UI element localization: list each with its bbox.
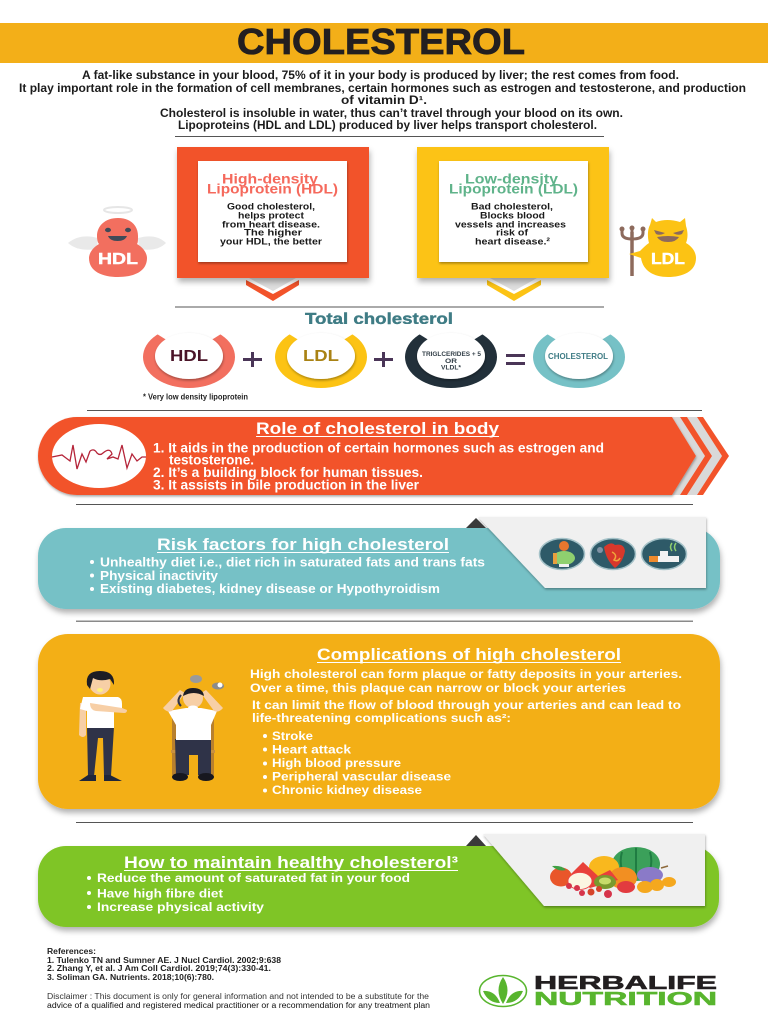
- panel: LDL card: heart disease.²: [475, 236, 550, 248]
- intro text: Lipoproteins (HDL and LDL) produced by liver helps transport cholesterol.: [178, 120, 597, 132]
- panel: complications: Heart attack: [272, 744, 352, 756]
- equation: total cholesterol: [141, 324, 627, 388]
- panel: complications: [38, 634, 720, 809]
- panel: LDL card: vessels and increases: [455, 220, 566, 230]
- panel: HDL card: The higher: [244, 228, 302, 238]
- title banner: CHOLESTEROL: [237, 21, 525, 62]
- intro text: of vitamin D¹.: [341, 95, 427, 107]
- panel: maintain healthy cholesterol: [38, 834, 719, 927]
- panel: maintain healthy cholesterol: Increase physical activity: [97, 900, 264, 914]
- operator: plus: [374, 352, 393, 367]
- disclaimer: [47, 992, 430, 1010]
- icon: heartbeat: [52, 424, 146, 488]
- panel: complications: Peripheral vascular disease: [272, 772, 451, 784]
- panel: risk factors: Risk factors for high cholesterol: [157, 535, 449, 554]
- panel: HDL card: Good cholesterol,: [227, 202, 315, 212]
- ring: triglycerides: [403, 324, 499, 388]
- ring: HDL: [141, 324, 237, 388]
- logo: Herbalife Nutrition: HERBALIFE: [534, 972, 717, 993]
- intro text: It play important role in the formation of cell membranes, certain hormones such as estrogen and testosterone, and production: [19, 83, 746, 95]
- panel: complications: High blood pressure: [272, 758, 401, 770]
- references: 2. Zhang Y, et al. J Am Coll Cardiol. 2019;74(3):330-41.: [47, 964, 271, 973]
- panel: role of cholesterol: [38, 417, 729, 495]
- icon: cigarette: [642, 538, 686, 570]
- panel: role of cholesterol: 3. It assists in bile production in the liver: [153, 478, 420, 492]
- operator: plus: [243, 352, 262, 367]
- ring: cholesterol: CHOLESTEROL: [548, 352, 608, 361]
- panel: HDL card: High-density: [222, 170, 318, 186]
- intro text: [19, 70, 746, 132]
- panel: complications: Chronic kidney disease: [272, 785, 422, 797]
- panel: risk factors: [38, 517, 720, 609]
- panel: risk factors: Unhealthy diet i.e., diet rich in saturated fats and trans fats: [100, 554, 485, 570]
- intro text: A fat-like substance in your blood, 75% of it in your body is produced by liver; the rest comes from food.: [82, 70, 679, 82]
- icon: seated man with headache: [163, 675, 224, 781]
- panel: role of cholesterol: Role of cholesterol in body: [256, 419, 500, 438]
- panel: HDL card: your HDL, the better: [220, 236, 322, 248]
- panel: complications: Complications of high cholesterol: [317, 645, 621, 664]
- footnote: VLDL: * Very low density lipoprotein: [143, 392, 248, 402]
- ring: triglycerides: OR: [445, 358, 458, 365]
- panel: maintain healthy cholesterol: Reduce the amount of saturated fat in your food: [97, 871, 410, 885]
- ring: LDL: [273, 324, 369, 388]
- ring: cholesterol: [531, 324, 627, 388]
- panel: role of cholesterol: 1. It aids in the production of certain hormones such as estrogen and: [153, 440, 604, 456]
- icon: obesity: [540, 538, 584, 570]
- panel: role of cholesterol: 2. It’s a building block for human tissues.: [153, 465, 423, 480]
- icon: HDL angel: [68, 207, 166, 277]
- references: References:: [47, 947, 96, 956]
- icon: heart: [590, 538, 636, 570]
- icon: LDL devil: [620, 218, 696, 277]
- disclaimer: Disclaimer : This document is only for general information and not intended to be a substitute for the: [47, 992, 430, 1001]
- logo: Herbalife Nutrition: NUTRITION: [534, 988, 717, 1009]
- title banner: [0, 21, 768, 63]
- operator: equals: [506, 356, 525, 364]
- panel: LDL card: Lipoprotein (LDL): [449, 180, 578, 196]
- panel: LDL card: [417, 147, 609, 301]
- logo: Herbalife Nutrition: [480, 972, 717, 1009]
- ring: LDL: LDL: [303, 348, 339, 365]
- references: [47, 947, 282, 982]
- references: 3. Soliman GA. Nutrients. 2018;10(6):780.: [47, 973, 214, 982]
- panel: complications: Over a time, this plaque can narrow or block your arteries: [250, 683, 626, 695]
- references: 1. Tulenko TN and Sumner AE. J Nucl Cardiol. 2002;9:638: [47, 956, 282, 965]
- panel: complications: High cholesterol can form plaque or fatty deposits in your arteries.: [250, 669, 682, 681]
- panel: complications: Stroke: [272, 731, 313, 743]
- icon: LDL devil: LDL: [651, 251, 685, 268]
- ring: triglycerides: VLDL*: [441, 364, 462, 372]
- panel: risk factors: Physical inactivity: [100, 568, 219, 583]
- panel: HDL card: Lipoprotein (HDL): [207, 180, 338, 196]
- panel: complications: It can limit the flow of blood through your arteries and can lead to: [252, 700, 681, 712]
- panel: maintain healthy cholesterol: How to maintain healthy cholesterol³: [124, 853, 458, 872]
- panel: LDL card: Low-density: [465, 170, 558, 186]
- disclaimer: advice of a qualified and registered medical practitioner or a recommendation for any treatment plan: [47, 1001, 430, 1010]
- panel: HDL card: helps protect: [238, 210, 305, 222]
- icon: HDL angel: HDL: [98, 251, 138, 268]
- icon: fruits: [550, 847, 676, 898]
- panel: role of cholesterol: testosterone.: [169, 452, 254, 468]
- panel: maintain healthy cholesterol: Have high fibre diet: [97, 886, 223, 900]
- ring: triglycerides: TRIGLCERIDES + 5: [422, 351, 482, 358]
- panel: complications: life-threatening complications such as²:: [252, 713, 511, 725]
- panel: HDL card: from heart disease.: [222, 220, 320, 230]
- panel: LDL card: risk of: [496, 228, 529, 238]
- panel: risk factors: Existing diabetes, kidney disease or Hypothyroidism: [100, 581, 440, 596]
- icon: standing man: [79, 671, 127, 781]
- heading: total cholesterol: Total cholesterol: [305, 311, 453, 328]
- panel: HDL card: [177, 147, 369, 301]
- panel: LDL card: Bad cholesterol,: [471, 202, 553, 212]
- intro text: Cholesterol is insoluble in water, thus can’t travel through your blood on its own.: [160, 108, 623, 120]
- panel: LDL card: Blocks blood: [480, 210, 545, 222]
- ring: HDL: HDL: [170, 348, 208, 365]
